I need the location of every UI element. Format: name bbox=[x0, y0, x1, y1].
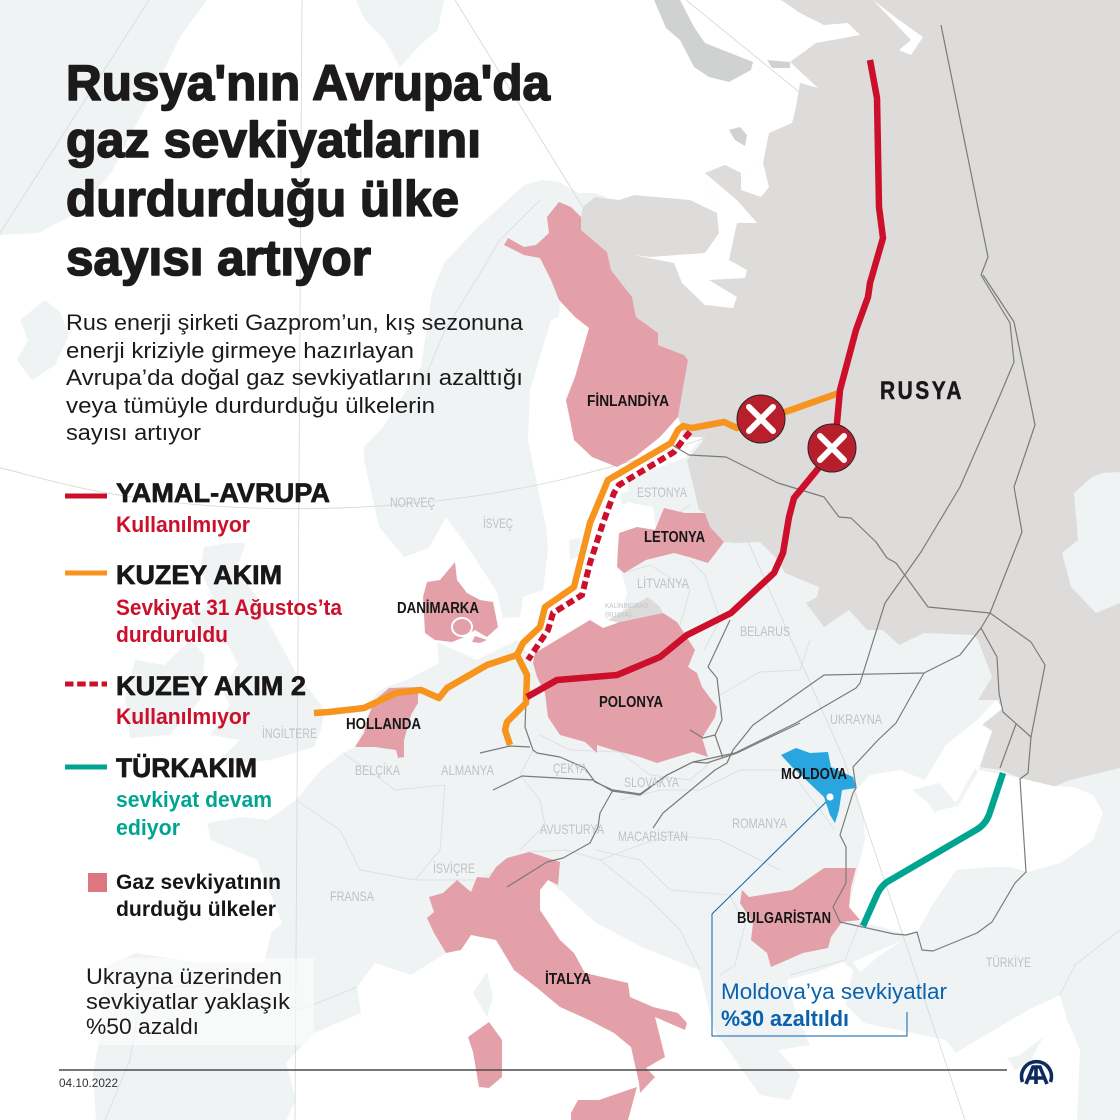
map labels: neighbouring countries: UKRAYNA bbox=[830, 711, 883, 727]
map labels: neighbouring countries: (RUSYA) bbox=[605, 612, 631, 619]
country borders bbox=[104, 200, 1120, 1120]
Russia bbox=[581, 0, 1120, 787]
legend: Kuzey Akim bbox=[65, 560, 343, 647]
icon: AA logo bbox=[1022, 1062, 1052, 1084]
intro text: sayısı artıyor bbox=[66, 420, 201, 445]
legend: Turkakim bbox=[65, 753, 272, 840]
note: Ukraine shipments: %50 azaldı bbox=[86, 1014, 199, 1039]
map labels: neighbouring countries: SLOVAKYA bbox=[624, 774, 680, 790]
icon: stopped Kuzey Akim bbox=[737, 395, 785, 443]
country: Italya bbox=[427, 852, 687, 1120]
Black Sea and Azov bbox=[849, 700, 1103, 972]
map labels: neighbouring countries: BELÇİKA bbox=[355, 761, 401, 778]
country: Moldova: MOLDOVA bbox=[781, 766, 847, 783]
intro text bbox=[66, 310, 524, 445]
callout: Moldova leader and text bbox=[712, 802, 947, 1036]
title: durdurduğu ülke bbox=[66, 171, 459, 227]
legend: Yamal-Avrupa bbox=[65, 478, 330, 537]
title bbox=[66, 55, 551, 286]
map labels: neighbouring countries: İSVİÇRE bbox=[433, 859, 475, 876]
title: gaz sevkiyatlarını bbox=[66, 112, 481, 168]
intro text: Avrupa’da doğal gaz sevkiyatlarını azalttığı bbox=[66, 365, 523, 390]
country: Bulgaristan: BULGARİSTAN bbox=[737, 909, 831, 927]
map labels: neighbouring countries: ALMANYA bbox=[441, 762, 495, 778]
legend: Yamal-Avrupa: Kullanılmıyor bbox=[116, 512, 250, 537]
map labels: neighbouring countries: AVUSTURYA bbox=[540, 821, 605, 837]
legend: Kuzey Akim 2: KUZEY AKIM 2 bbox=[116, 671, 306, 701]
country: Moldova bbox=[781, 748, 856, 823]
pipeline: Kuzey Akim 2 bbox=[528, 432, 690, 660]
footer rule bbox=[59, 1069, 1007, 1071]
legend: stopped countries: Gaz sevkiyatının bbox=[116, 871, 281, 894]
country: Letonya: LETONYA bbox=[644, 529, 705, 546]
map labels: neighbouring countries: FRANSA bbox=[330, 888, 375, 904]
icon: stopped Yamal-Avrupa bbox=[808, 424, 856, 472]
country: Bulgaristan bbox=[737, 868, 860, 967]
map labels: neighbouring countries: KALİNİNGRAD bbox=[605, 601, 648, 610]
small gas pipelines bbox=[480, 25, 1045, 951]
callout: Moldova leader and text: Moldova’ya sevkiyatlar bbox=[721, 979, 947, 1004]
note: Ukraine shipments: Ukrayna üzerinden bbox=[86, 964, 282, 989]
legend: stopped countries: durduğu ülkeler bbox=[116, 898, 276, 921]
label: Rusya: RUSYA bbox=[880, 377, 964, 405]
country: Danimarka: DANİMARKA bbox=[397, 599, 479, 617]
country: Letonya bbox=[617, 508, 724, 573]
callout: Moldova leader and text: %30 azaltıldı bbox=[721, 1006, 849, 1031]
country: Danimarka bbox=[397, 562, 498, 643]
intro text: Rus enerji şirketi Gazprom’un, kış sezonuna bbox=[66, 310, 524, 335]
country: Polonya bbox=[533, 613, 717, 763]
map labels: neighbouring countries: NORVEÇ bbox=[390, 494, 435, 510]
legend: Yamal-Avrupa: YAMAL-AVRUPA bbox=[116, 478, 330, 508]
legend: Kuzey Akim: Sevkiyat 31 Ağustos’ta bbox=[116, 595, 343, 620]
intro text: enerji kriziyle girmeye hazırlayan bbox=[66, 338, 414, 363]
country: Hollanda: HOLLANDA bbox=[346, 716, 421, 733]
map labels: neighbouring countries bbox=[262, 484, 1031, 970]
pipeline: Yamal-Avrupa bbox=[527, 60, 883, 697]
map labels: neighbouring countries: İNGİLTERE bbox=[262, 724, 317, 741]
legend: Turkakim: ediyor bbox=[116, 815, 180, 840]
map labels: neighbouring countries: ESTONYA bbox=[637, 484, 687, 500]
legend: stopped countries bbox=[88, 871, 281, 921]
note: Ukraine shipments bbox=[74, 958, 314, 1045]
country: Italya: İTALYA bbox=[545, 970, 591, 988]
map labels: neighbouring countries: BELARUS bbox=[740, 623, 790, 639]
legend: Kuzey Akim: durduruldu bbox=[116, 622, 228, 647]
intro text: veya tümüyle durdurduğu ülkelerin bbox=[66, 393, 435, 418]
map labels: neighbouring countries: ROMANYA bbox=[732, 815, 788, 831]
country: Finlandiya: FİNLANDİYA bbox=[587, 392, 669, 410]
map labels: neighbouring countries: ÇEKYA bbox=[553, 760, 587, 776]
legend: Kuzey Akim: KUZEY AKIM bbox=[116, 560, 282, 590]
map labels: neighbouring countries: LİTVANYA bbox=[637, 574, 690, 591]
title: sayısı artıyor bbox=[66, 230, 371, 286]
map labels: neighbouring countries: TÜRKİYE bbox=[986, 953, 1031, 970]
country: Hollanda bbox=[346, 687, 421, 758]
legend: Turkakim: TÜRKAKIM bbox=[116, 753, 257, 783]
title: Rusya'nın Avrupa'da bbox=[66, 55, 551, 111]
pipeline: Turkakim bbox=[863, 773, 1003, 926]
map labels: neighbouring countries: İSVEÇ bbox=[483, 514, 513, 531]
note: Ukraine shipments: sevkiyatlar yaklaşık bbox=[86, 989, 291, 1014]
legend: Kuzey Akim 2: Kullanılmıyor bbox=[116, 704, 250, 729]
legend: Turkakim: sevkiyat devam bbox=[116, 787, 272, 812]
pipeline: Kuzey Akim bbox=[314, 393, 839, 745]
legend: Kuzey Akim 2 bbox=[65, 671, 306, 729]
map labels: neighbouring countries: MACARİSTAN bbox=[618, 827, 688, 844]
country: Finlandiya bbox=[504, 202, 688, 467]
country: Polonya: POLONYA bbox=[599, 694, 663, 711]
date: 04.10.2022 bbox=[59, 1076, 118, 1090]
